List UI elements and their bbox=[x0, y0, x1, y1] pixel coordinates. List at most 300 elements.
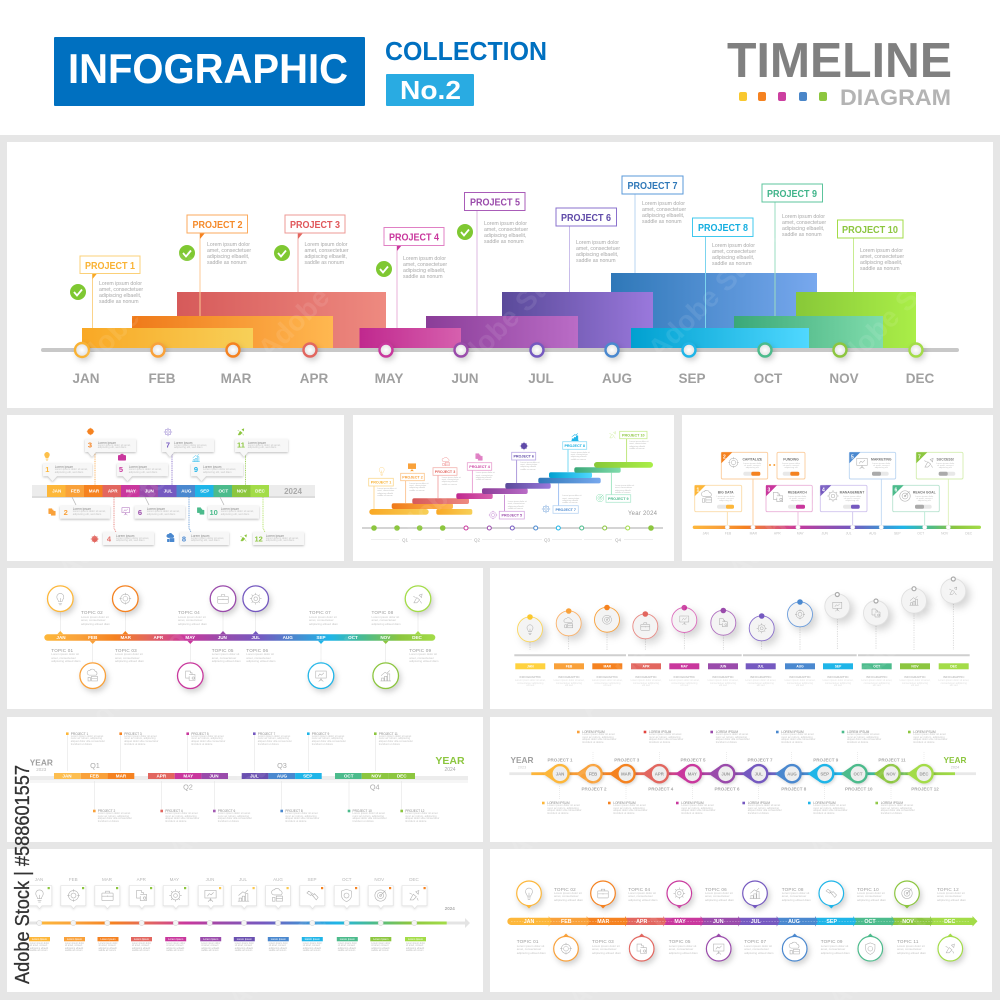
card text 1: adipiscing elit bbox=[719, 500, 732, 502]
project 4 note: PROJECT 4 bbox=[165, 809, 183, 813]
tag note jun: sit amet, consect bbox=[201, 945, 218, 947]
year bar: 2024 bbox=[284, 487, 302, 496]
project 9 flag: PROJECT 9 bbox=[767, 188, 817, 200]
text block: project 6 bbox=[576, 240, 620, 264]
project labels: PROJECT 1 bbox=[547, 758, 573, 763]
text: callout 8: Lorem ipsum bbox=[191, 534, 209, 538]
year label: 2024 bbox=[445, 906, 455, 911]
callout numbers: 9 bbox=[194, 465, 198, 474]
topic 02: TOPIC 02 bbox=[554, 887, 576, 892]
text block: project 1: adipiscing elbaelit, bbox=[99, 293, 141, 299]
project 2 note bbox=[98, 809, 132, 824]
text: project 6: Lorem ipsum dolor sit bbox=[520, 462, 539, 464]
pin icons bbox=[526, 887, 954, 955]
tag note apr: saddle as nonum bbox=[132, 950, 150, 952]
text: callout 2: Lorem ipsum bbox=[73, 507, 91, 511]
text: project 5: saddle as nonum bbox=[508, 508, 523, 510]
project 3 note: Lorem ipsum dolor sit amet bbox=[124, 735, 157, 738]
project label text: PROJECT 2 bbox=[402, 475, 423, 479]
tag note oct: sit amet, consect bbox=[338, 945, 355, 947]
note feb: nunc ac rutrum, adipiscing bbox=[582, 736, 614, 739]
topic 01 bbox=[51, 648, 80, 664]
callout numbers: 6 bbox=[138, 508, 142, 517]
icon boxes bbox=[27, 886, 427, 909]
year start: YEAR bbox=[30, 758, 53, 768]
quarter month segments: AUG bbox=[277, 774, 288, 779]
project labels: PROJECT 3 bbox=[614, 758, 640, 763]
band month labels: OCT bbox=[864, 919, 876, 925]
month labels: JUL bbox=[846, 532, 852, 536]
note dec: tincidunt ut dolore bbox=[913, 741, 935, 744]
card text 5: Lorem ipsum dolor bbox=[872, 462, 890, 464]
callout numbers: 2 bbox=[64, 508, 68, 517]
card titles: RESEARCH bbox=[788, 490, 807, 494]
month labels: MAY bbox=[375, 371, 403, 386]
watermark text: Adobe Stock bbox=[62, 242, 205, 385]
topic 11: TOPIC 11 bbox=[897, 939, 919, 944]
text: callout 5: Lorem ipsum bbox=[129, 465, 147, 469]
text: callout 8: adipiscing elit, sed diam bbox=[191, 539, 220, 542]
tag note may: adipiscing elbaelit bbox=[166, 948, 184, 950]
text: project 8: saddle as nonum bbox=[571, 459, 586, 461]
note apr: tincidunt ut dolore bbox=[649, 741, 670, 744]
text: callout 11: Lorem ipsum bbox=[248, 441, 266, 445]
topic 04: TOPIC 04 bbox=[178, 610, 200, 615]
topic 01: amet, consectetuer bbox=[517, 947, 541, 951]
year bar: OCT bbox=[218, 489, 228, 494]
project 6 note: Lorem ipsum dolor sit amet bbox=[218, 812, 250, 815]
stems bbox=[67, 735, 402, 810]
project 1 note: aliquet dolor ulla consectetur bbox=[71, 740, 105, 743]
month bar: JUN bbox=[218, 635, 228, 640]
tag text dec bbox=[938, 675, 970, 688]
card text 2: adipiscing elit bbox=[746, 467, 759, 469]
note aug: LOREM IPSUM bbox=[781, 730, 804, 734]
text block: project 1 bbox=[99, 281, 143, 304]
month tags: MAR bbox=[604, 665, 612, 669]
note may bbox=[681, 801, 716, 816]
month tags: AUG bbox=[796, 665, 804, 669]
tag note jul: adipiscing elbaelit bbox=[235, 948, 253, 950]
date tags: Lorem Ipsum bbox=[237, 937, 252, 941]
text: project 2: saddle as nonum bbox=[409, 490, 425, 492]
note oct: aliquet dolor ulla consectetur bbox=[847, 738, 881, 741]
tag note mar: sit amet, consect bbox=[98, 945, 116, 947]
project 11 note: tincidunt ut dolore bbox=[379, 743, 400, 746]
quarter labels: Q3 bbox=[277, 761, 287, 770]
topic 01: amet, consectetuer bbox=[51, 656, 76, 660]
quarter labels: Q2 bbox=[183, 782, 193, 791]
arrow axis bbox=[28, 918, 470, 928]
month labels: APR bbox=[137, 877, 147, 882]
watermark text: Adobe Stock bbox=[72, 602, 215, 745]
topic 03: TOPIC 03 bbox=[115, 648, 137, 653]
topic 05 bbox=[669, 939, 698, 955]
topic 06: adipiscing elitsed diam bbox=[246, 659, 275, 663]
topic 12: amet, consectetuer bbox=[937, 894, 962, 898]
topic 04: amet, consectetuer bbox=[628, 894, 653, 898]
tag note jul: Lorem ipsum dolor bbox=[235, 943, 254, 945]
topic 03: Lorem ipsum dolor sit bbox=[115, 652, 143, 656]
project 7 flag: PROJECT 7 bbox=[628, 180, 678, 192]
topic 04: adipiscing elitsed diam bbox=[178, 622, 207, 626]
panel: topic circles bbox=[7, 568, 483, 709]
tag note dec bbox=[406, 943, 427, 953]
note jul: Lorem ipsum dolor sit amet bbox=[748, 804, 780, 807]
topic 08: Lorem ipsum dolor sit bbox=[782, 891, 809, 895]
topic 11: adipiscing elitsed diam bbox=[897, 951, 926, 955]
callout numbers: 5 bbox=[119, 465, 123, 474]
text: project 3: Lorem ipsum dolor sit bbox=[442, 477, 461, 479]
note jan: aliquet dolor ulla consectetur bbox=[547, 809, 582, 812]
text block: project 6: adipiscing elbaelit, bbox=[576, 252, 618, 258]
text: callout 11 bbox=[248, 441, 281, 449]
text: project 9: Lorem ipsum dolor sit bbox=[615, 485, 634, 487]
text: callout 10: adipiscing elit, sed diam bbox=[221, 513, 249, 516]
box icons bbox=[36, 888, 419, 902]
topic 05: adipiscing elitsed diam bbox=[669, 951, 698, 955]
year bar: AUG bbox=[181, 489, 192, 494]
watermark text: Adobe Stock bbox=[162, 722, 305, 865]
note dec: Lorem ipsum dolor sit amet bbox=[913, 733, 946, 736]
tag text nov: elit sed bbox=[911, 684, 919, 687]
text block: project 5: saddle as nonum bbox=[484, 238, 524, 244]
panel: quarterly year timeline bbox=[7, 717, 483, 842]
note jul bbox=[748, 801, 782, 816]
note sep: tincidunt ut dolore bbox=[813, 812, 835, 815]
tag note jul bbox=[235, 943, 256, 953]
tag text nov: consectetuer adipiscing bbox=[902, 682, 928, 685]
tag text oct bbox=[861, 675, 893, 688]
topic 11: Lorem ipsum dolor sit bbox=[897, 944, 925, 948]
card text 3: sit amet, consect bbox=[789, 498, 806, 500]
topic 07: Lorem ipsum dolor sit bbox=[309, 614, 337, 618]
project 7 note: tincidunt ut dolore bbox=[258, 743, 279, 746]
text: callout 10 bbox=[220, 507, 254, 516]
band month labels: APR bbox=[636, 919, 647, 925]
panel: callout timeline bbox=[7, 415, 344, 561]
band month labels: AUG bbox=[788, 919, 800, 925]
card titles: SUCCESS! bbox=[937, 458, 954, 462]
callout numbers: 10 bbox=[210, 508, 218, 517]
tag text aug: elit sed bbox=[796, 684, 804, 687]
text block: project 2: saddle as nonum bbox=[207, 260, 247, 266]
topic 09: TOPIC 09 bbox=[409, 648, 431, 653]
text: callout 1: Lorem ipsum bbox=[55, 465, 73, 469]
note oct: Lorem ipsum dolor sit amet bbox=[847, 733, 879, 736]
text: project 8: adipiscing elbaelit bbox=[571, 456, 586, 458]
project 4 note: tincidunt ut dolore bbox=[165, 820, 186, 823]
note nov bbox=[881, 801, 915, 816]
callout numbers: 12 bbox=[255, 534, 263, 544]
year end bbox=[943, 755, 967, 770]
project 10 note: aliquet dolor ulla consectetur bbox=[352, 817, 387, 820]
panel: icon box timeline bbox=[7, 849, 483, 992]
card text 5 bbox=[872, 462, 890, 469]
text: project 10: Lorem ipsum dolor sit bbox=[629, 441, 648, 443]
topic 12: adipiscing elitsed diam bbox=[937, 898, 966, 902]
month labels: JUL bbox=[755, 771, 763, 776]
note nov: LOREM IPSUM bbox=[881, 801, 903, 805]
timeline heading: TIMELINE bbox=[727, 34, 952, 88]
topic 05: amet, consectetuer bbox=[212, 656, 236, 660]
tag text sep: INFOGRAPHIC bbox=[827, 675, 849, 679]
card text 4: adipiscing elit bbox=[845, 500, 859, 502]
project 8 note: aliquet dolor ulla consectetur bbox=[285, 817, 319, 820]
month labels: DEC bbox=[965, 532, 973, 536]
callout numbers: 7 bbox=[166, 440, 170, 450]
topic 09: adipiscing elitsed diam bbox=[409, 659, 438, 663]
tag text apr: consectetuer adipiscing bbox=[633, 682, 659, 685]
axis with nodes bbox=[362, 526, 663, 530]
month bar: APR bbox=[153, 635, 164, 640]
month tags: OCT bbox=[873, 665, 880, 669]
text: callout 2 bbox=[72, 507, 106, 516]
topic 01: TOPIC 01 bbox=[517, 939, 539, 944]
year label: Year 2024 bbox=[628, 511, 658, 517]
project 7 flag bbox=[622, 176, 683, 273]
month labels: MAY bbox=[797, 532, 805, 536]
year bar: NOV bbox=[237, 489, 248, 494]
project 5 flag bbox=[464, 192, 525, 316]
panel: arrow band topics bbox=[490, 849, 992, 992]
topic 08 bbox=[782, 887, 811, 902]
tag note feb: saddle as nonum bbox=[65, 950, 82, 952]
badge circles bbox=[518, 578, 966, 642]
text: project 3: adipiscing elbaelit bbox=[442, 481, 457, 483]
topic 09: Lorem ipsum dolor sit bbox=[409, 652, 437, 656]
band month labels: FEB bbox=[561, 919, 572, 925]
card titles: FUNDING bbox=[783, 458, 799, 462]
project 1 flag: PROJECT 1 bbox=[85, 260, 135, 272]
note mar: tincidunt ut dolore bbox=[613, 812, 635, 815]
text: project 10 bbox=[629, 440, 648, 450]
topic 04: amet, consectetuer bbox=[178, 618, 203, 622]
text: callout 3: adipiscing elit, sed diam bbox=[98, 446, 126, 449]
text: callout 12: adipiscing elit, sed diam bbox=[266, 539, 294, 542]
note mar: aliquet dolor ulla consectetur bbox=[613, 809, 648, 812]
year start: 2023 bbox=[36, 767, 47, 772]
tag note feb: sit amet, consect bbox=[65, 945, 82, 947]
text block: project 5: Lorem ipsum dolor bbox=[484, 221, 527, 227]
topic 05: TOPIC 05 bbox=[212, 648, 234, 653]
text block: project 9: adipiscing elbaelit, bbox=[782, 226, 824, 232]
project 6 note: aliquet dolor ulla consectetur bbox=[218, 817, 252, 820]
tag note aug bbox=[269, 943, 290, 953]
note jan bbox=[547, 801, 582, 816]
year bar: DEC bbox=[255, 489, 266, 494]
text: project 6 bbox=[520, 462, 540, 471]
topic 02: TOPIC 02 bbox=[81, 610, 103, 615]
number badge: No.2 bbox=[400, 75, 461, 105]
text block: project 9: amet, consectetuer bbox=[782, 220, 826, 226]
date tags: Lorem Ipsum bbox=[168, 937, 183, 941]
tag note jan: sit amet, consect bbox=[30, 945, 47, 947]
project label text: PROJECT 3 bbox=[435, 470, 455, 474]
project labels bbox=[369, 431, 647, 519]
topic 06 bbox=[246, 648, 275, 664]
month labels: AUG bbox=[273, 877, 283, 882]
tag text jan: consectetuer adipiscing bbox=[517, 682, 543, 685]
text block: project 5: amet, consectetuer bbox=[484, 227, 528, 233]
project 12 note: aliquet dolor ulla consectetur bbox=[405, 817, 439, 820]
tag text aug: INFOGRAPHIC bbox=[789, 675, 811, 679]
project 8 note: Lorem ipsum dolor sit amet bbox=[285, 812, 318, 815]
text: callout 11: Lorem ipsum dolor sit amet, bbox=[248, 444, 281, 447]
note aug: tincidunt ut dolore bbox=[781, 741, 803, 744]
callout numbers: 8 bbox=[182, 534, 186, 544]
tag note feb: Lorem ipsum dolor bbox=[65, 943, 84, 945]
tag text jun: consectetuer adipiscing bbox=[710, 682, 736, 685]
rail bbox=[509, 772, 976, 775]
project 9 flag bbox=[762, 184, 822, 316]
topic 02: amet, consectetuer bbox=[81, 618, 106, 622]
text: project 4: saddle as nonum bbox=[476, 479, 491, 481]
connectors bbox=[72, 452, 265, 532]
text: project 4 bbox=[476, 472, 495, 481]
band month labels: NOV bbox=[902, 919, 914, 925]
text: callout 4: Lorem ipsum bbox=[116, 534, 134, 538]
note nov: Lorem ipsum dolor sit amet bbox=[881, 804, 913, 807]
date tags: Lorem Ipsum bbox=[67, 937, 82, 941]
text: project 7: Lorem ipsum dolor sit bbox=[562, 495, 581, 497]
note apr: aliquet dolor ulla consectetur bbox=[649, 738, 683, 741]
note may: nunc ac rutrum, adipiscing bbox=[681, 807, 713, 810]
month labels: DEC bbox=[409, 877, 419, 882]
project 8 note: PROJECT 8 bbox=[285, 809, 303, 813]
band month labels: JUN bbox=[713, 919, 724, 925]
number corners: 2 bbox=[723, 454, 726, 460]
tag note oct bbox=[338, 943, 359, 953]
text: project 10: adipiscing elbaelit bbox=[629, 446, 645, 448]
topic 06: Lorem ipsum dolor sit bbox=[246, 652, 274, 656]
text block: project 2: adipiscing elbaelit, bbox=[207, 254, 249, 260]
month labels: OCT bbox=[754, 371, 783, 386]
topic 03 bbox=[115, 648, 144, 664]
topic 02: Lorem ipsum dolor sit bbox=[81, 614, 109, 618]
note apr: nunc ac rutrum, adipiscing bbox=[649, 736, 680, 739]
topic 12 bbox=[937, 887, 966, 902]
quarter month segments: NOV bbox=[371, 774, 382, 779]
topic 04: adipiscing elitsed diam bbox=[628, 898, 657, 902]
text: project 8: Lorem ipsum dolor sit bbox=[571, 452, 590, 454]
year bar: JAN bbox=[52, 489, 62, 494]
date tags: Lorem Ipsum bbox=[305, 937, 320, 941]
tag note oct: Lorem ipsum dolor bbox=[338, 943, 357, 945]
project 11 note bbox=[379, 732, 413, 746]
tag note feb: adipiscing elbaelit bbox=[65, 948, 83, 950]
month labels bbox=[35, 877, 419, 882]
text block: project 4: Lorem ipsum dolor bbox=[403, 256, 446, 262]
card text 7: sit amet, consect bbox=[937, 465, 954, 467]
text block: project 7: adipiscing elbaelit, bbox=[642, 213, 684, 219]
project icons bbox=[379, 432, 616, 519]
text: project 3 bbox=[442, 476, 461, 486]
project 5 note: tincidunt ut dolore bbox=[191, 743, 212, 746]
month labels: FEB bbox=[69, 877, 78, 882]
topic 02: amet, consectetuer bbox=[554, 894, 579, 898]
text: callout 10: Lorem ipsum dolor sit amet, bbox=[221, 510, 254, 513]
note jan: Lorem ipsum dolor sit amet bbox=[547, 804, 580, 807]
topic 01: adipiscing elitsed diam bbox=[51, 659, 80, 663]
quarter labels: Q4 bbox=[615, 538, 621, 542]
callout numbers: 1 bbox=[45, 465, 49, 474]
topic 04 bbox=[178, 610, 207, 626]
month labels: APR bbox=[655, 771, 665, 776]
tag note sep bbox=[303, 943, 324, 953]
project 7 note: nunc ac rutrum, adipiscing bbox=[258, 737, 289, 740]
text: callout 10: Lorem ipsum bbox=[221, 507, 239, 511]
text: callout 7: Lorem ipsum bbox=[174, 441, 192, 445]
topic 09: Lorem ipsum dolor sit bbox=[821, 944, 848, 948]
month labels: JUL bbox=[528, 371, 554, 386]
watermark text bbox=[52, 222, 965, 1000]
watermark text: Adobe Stock bbox=[252, 222, 395, 365]
tag text jun bbox=[707, 675, 739, 688]
project 2 flag: PROJECT 2 bbox=[192, 219, 243, 231]
topic 09 bbox=[409, 648, 438, 664]
year end bbox=[428, 750, 468, 776]
project 10 flag bbox=[838, 220, 903, 292]
tag note may: Lorem ipsum dolor bbox=[166, 943, 185, 945]
text block: project 8 bbox=[712, 243, 756, 266]
text: project 5 bbox=[508, 500, 527, 510]
month labels: JUL bbox=[239, 877, 247, 882]
text: callout 6 bbox=[146, 507, 180, 516]
tag note aug: sit amet, consect bbox=[269, 945, 286, 947]
tag note may: saddle as nonum bbox=[166, 950, 184, 952]
month bar: NOV bbox=[380, 635, 391, 640]
text block: project 6: Lorem ipsum dolor bbox=[576, 240, 619, 246]
text: project 1: adipiscing elbaelit bbox=[377, 493, 393, 495]
text: callout 1: Lorem ipsum dolor sit amet, bbox=[55, 468, 88, 471]
tag text feb: elit sed bbox=[565, 684, 573, 687]
project 8 note bbox=[285, 809, 319, 824]
tag text jul bbox=[745, 675, 777, 688]
tag text jan: Lorem ipsum dolor sit amet, bbox=[515, 679, 546, 682]
project 9 note: tincidunt ut dolore bbox=[312, 743, 333, 746]
note aug: nunc ac rutrum, adipiscing bbox=[781, 736, 813, 739]
project 6 note: nunc ac rutrum, adipiscing bbox=[218, 815, 249, 818]
month labels: NOV bbox=[941, 532, 949, 536]
month nodes bbox=[75, 343, 922, 357]
topic 06: TOPIC 06 bbox=[705, 887, 727, 892]
gantt bars bbox=[82, 273, 916, 348]
note jul: LOREM IPSUM bbox=[748, 801, 770, 805]
project labels: PROJECT 8 bbox=[781, 786, 807, 791]
quarter month segments: JUL bbox=[250, 774, 259, 779]
note feb: Lorem ipsum dolor sit amet bbox=[582, 733, 615, 736]
text block: project 5: adipiscing elbaelit, bbox=[484, 233, 526, 239]
project 1 note: tincidunt ut dolore bbox=[71, 743, 92, 746]
topic 04: Lorem ipsum dolor sit bbox=[628, 891, 656, 895]
tag note jan bbox=[30, 943, 51, 953]
text: project 3: amet, consectetuer bbox=[442, 479, 459, 481]
callout numbers: 11 bbox=[237, 440, 245, 450]
topic 09 bbox=[821, 939, 850, 955]
month bar: JAN bbox=[56, 635, 66, 640]
tag text jul: consectetuer adipiscing bbox=[748, 682, 774, 685]
note jun: tincidunt ut dolore bbox=[716, 741, 737, 744]
month labels: SEP bbox=[894, 532, 901, 536]
text: project 6: saddle as nonum bbox=[520, 469, 536, 471]
date tags: Lorem Ipsum bbox=[134, 937, 149, 941]
month labels: JUN bbox=[206, 877, 214, 882]
month labels: OCT bbox=[917, 532, 924, 536]
note dec: aliquet dolor ulla consectetur bbox=[913, 738, 948, 741]
watermark text: Adobe Stock bbox=[822, 242, 965, 385]
note aug bbox=[781, 730, 816, 745]
